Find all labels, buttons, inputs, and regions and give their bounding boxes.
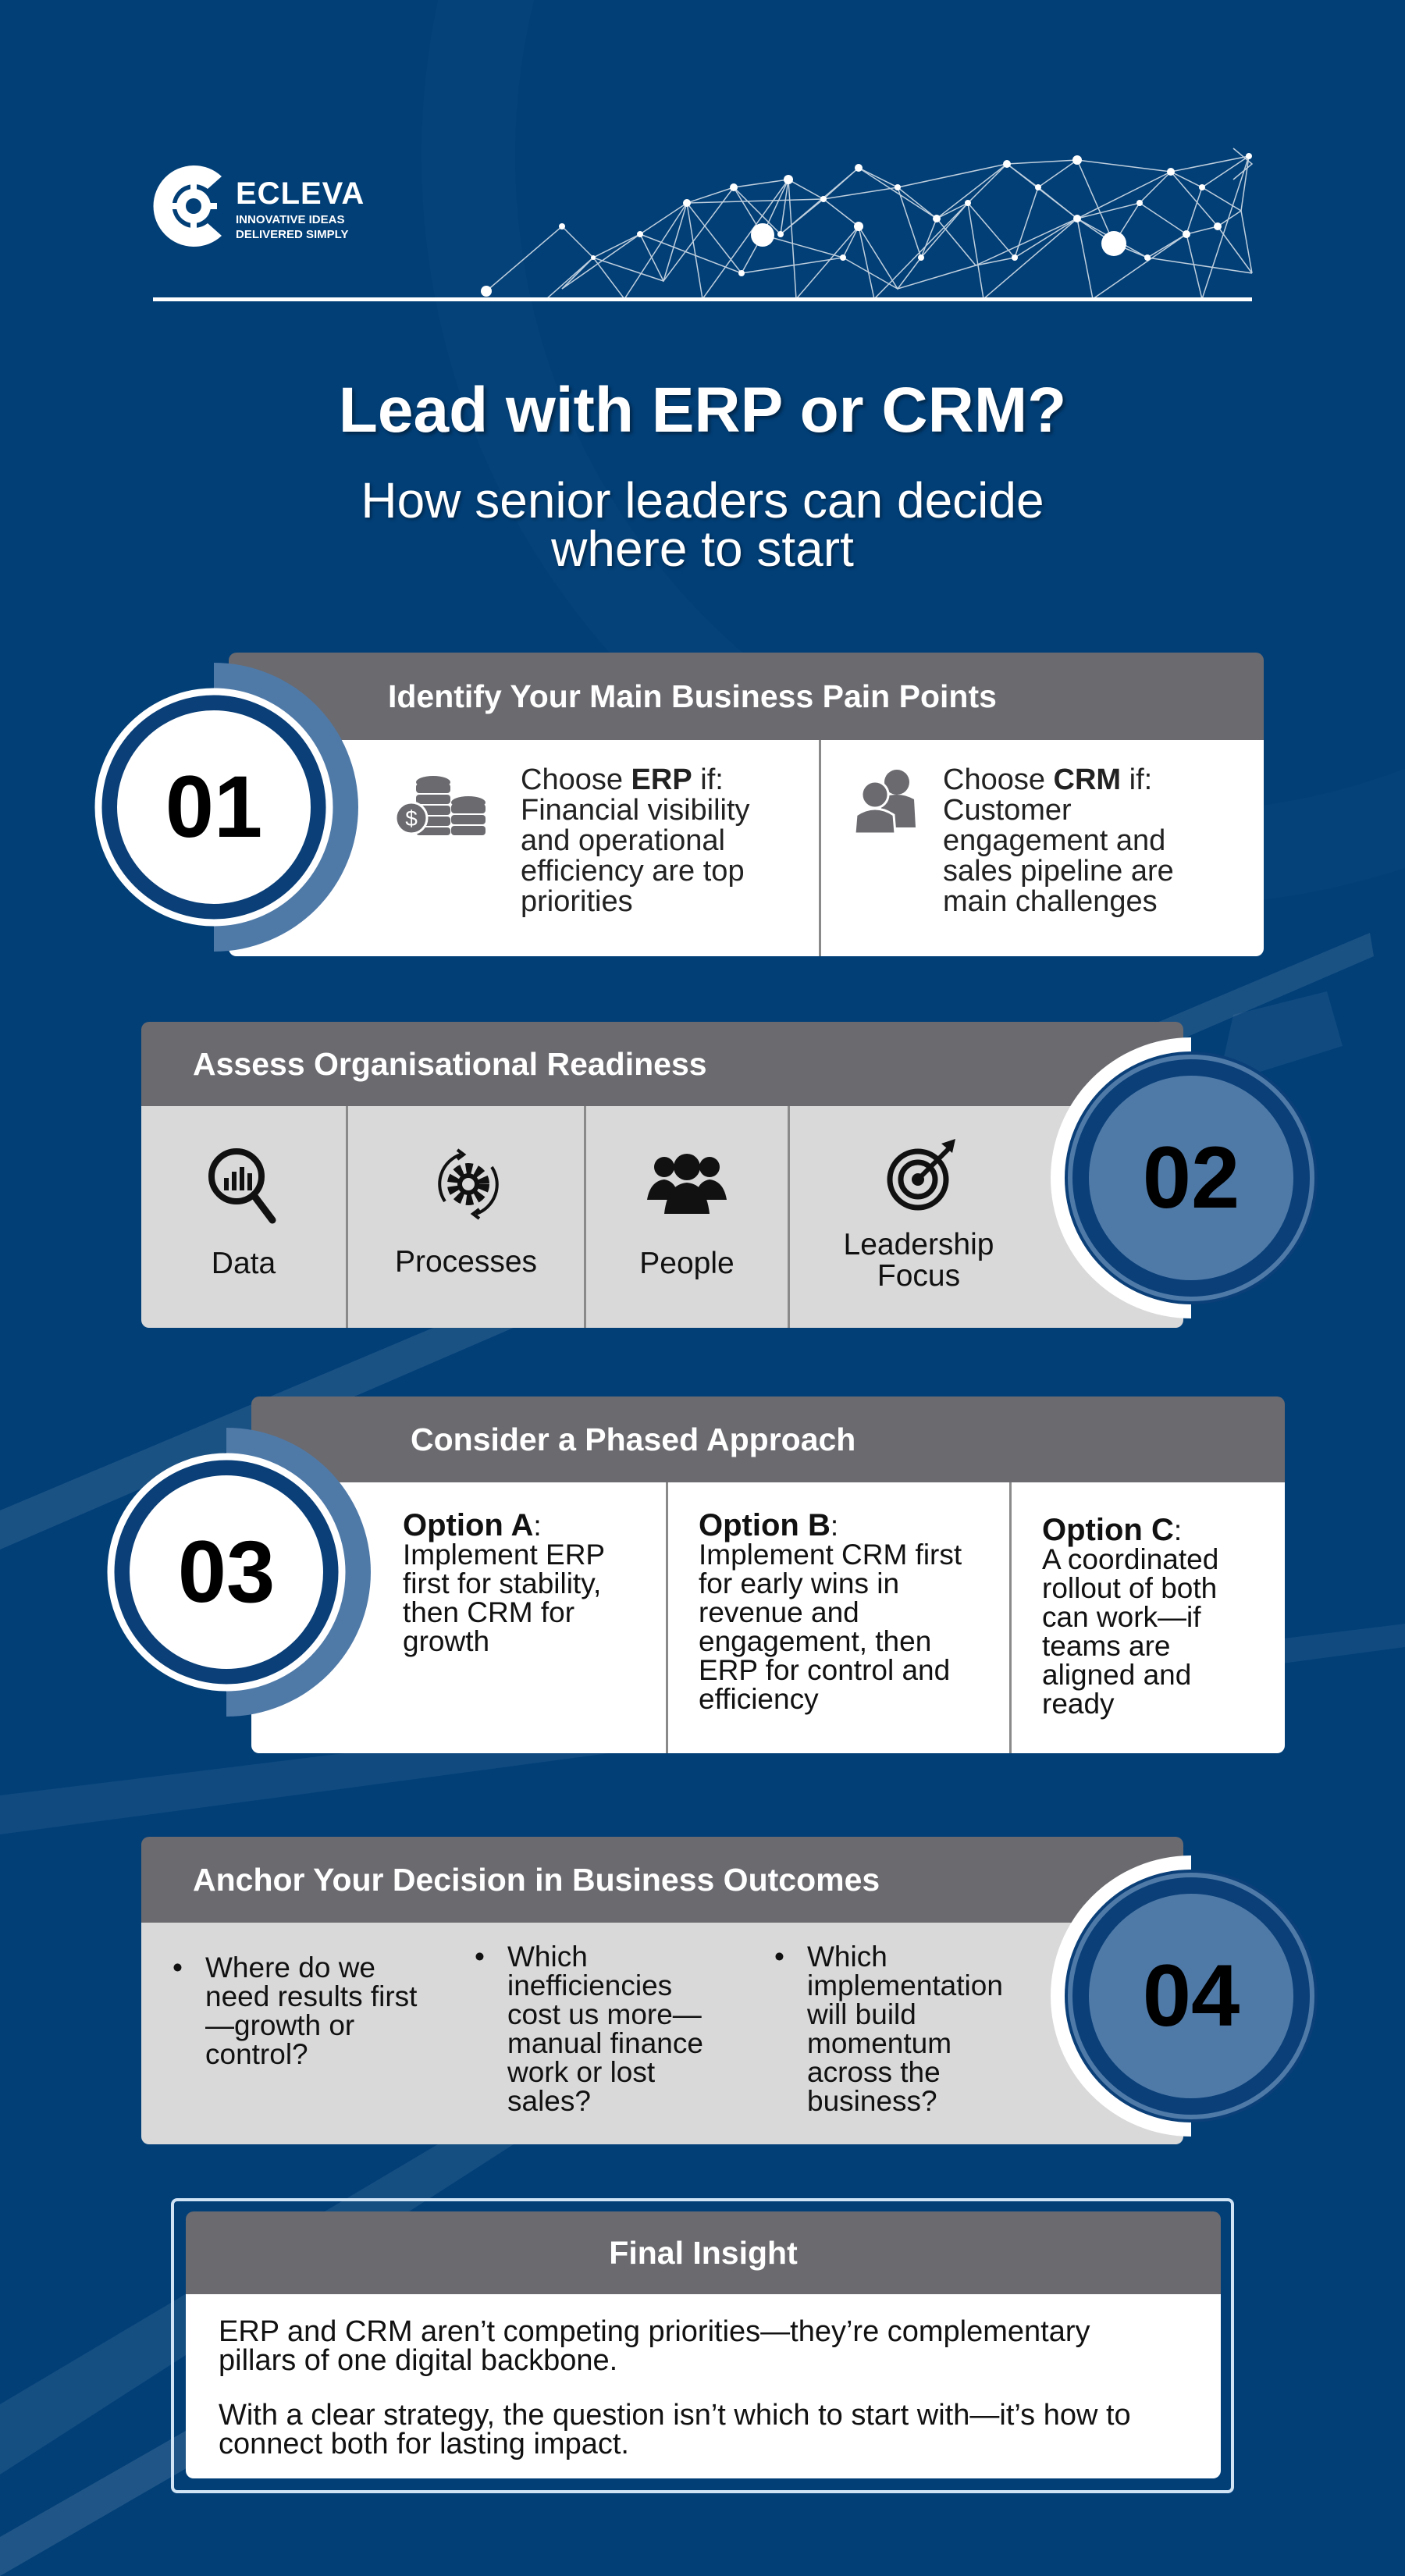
item: leadership focus: Leadership bbox=[843, 1228, 994, 1261]
bullet 3: across the bbox=[807, 2056, 941, 2088]
subtitle: where to start bbox=[551, 521, 854, 577]
body 1 bbox=[229, 740, 1264, 956]
bullet 1: —growth or bbox=[205, 2009, 354, 2041]
item: leadership focus bbox=[843, 1139, 994, 1293]
icon: coins: $ bbox=[405, 806, 418, 831]
header 3: Consider a Phased Approach bbox=[411, 1421, 855, 1457]
bullet 2: Which bbox=[507, 1941, 588, 1973]
number 03: 03 bbox=[178, 1523, 275, 1621]
final insight bbox=[171, 2198, 1234, 2493]
option B: Option B: bbox=[699, 1508, 838, 1542]
item: data: Data bbox=[212, 1247, 276, 1280]
bullet 1: control? bbox=[205, 2038, 308, 2070]
option A: Option A: bbox=[403, 1508, 542, 1542]
option B: ERP for control and bbox=[699, 1654, 950, 1686]
text: choose ERP: Choose ERP if: bbox=[521, 763, 724, 796]
bullet 3: • bbox=[774, 1941, 784, 1973]
bullet 2: sales? bbox=[507, 2085, 591, 2117]
header 1 bbox=[229, 653, 1264, 740]
text: choose CRM: Customer bbox=[943, 794, 1072, 827]
icon: gear C bbox=[153, 165, 222, 247]
option C: teams are bbox=[1042, 1630, 1171, 1662]
option A: Implement ERP bbox=[403, 1539, 605, 1571]
panel 1: pain points bbox=[95, 653, 1264, 956]
item: people bbox=[639, 1154, 735, 1280]
option C: rollout of both bbox=[1042, 1572, 1217, 1604]
header 2: Assess Organisational Readiness bbox=[193, 1046, 707, 1082]
logo: ECLEVA bbox=[236, 176, 365, 211]
bullet 2: • bbox=[475, 1941, 485, 1973]
header 3 bbox=[251, 1397, 1285, 1482]
header 2 bbox=[141, 1022, 1183, 1106]
bullet 1: Where do we bbox=[205, 1952, 375, 1984]
badge 03 bbox=[108, 1428, 371, 1717]
badge 01 bbox=[95, 663, 358, 952]
item: processes: Processes bbox=[395, 1245, 537, 1279]
bullet 1: • bbox=[173, 1952, 183, 1984]
logo: INNOVATIVE IDEAS bbox=[236, 213, 344, 226]
option C: can work—if bbox=[1042, 1601, 1201, 1633]
badge 02 bbox=[1051, 1037, 1314, 1318]
option A: then CRM for bbox=[403, 1596, 574, 1628]
text: choose ERP bbox=[521, 763, 750, 918]
text: choose ERP: priorities bbox=[521, 885, 633, 918]
text: choose ERP: Financial visibility bbox=[521, 794, 750, 827]
bullet 1: need results first bbox=[205, 1980, 417, 2012]
body text bbox=[186, 2294, 1221, 2478]
option B: engagement, then bbox=[699, 1625, 931, 1657]
header: final insight bbox=[186, 2211, 1221, 2294]
subtitle: How senior leaders can decide bbox=[361, 472, 1044, 528]
panel 3: phased approach bbox=[108, 1397, 1285, 1753]
option C bbox=[1042, 1513, 1218, 1720]
text: choose CRM: main challenges bbox=[943, 885, 1158, 918]
text: choose CRM: sales pipeline are bbox=[943, 855, 1174, 888]
option A bbox=[403, 1508, 605, 1657]
option B: efficiency bbox=[699, 1683, 819, 1715]
body 2 bbox=[141, 1106, 1183, 1328]
text: choose ERP: efficiency are top bbox=[521, 855, 745, 888]
item: data bbox=[208, 1148, 276, 1280]
logo bbox=[153, 165, 365, 247]
badge 04 bbox=[1051, 1856, 1314, 2137]
logo: DELIVERED SIMPLY bbox=[236, 228, 348, 241]
bullet 2: cost us more— bbox=[507, 1998, 702, 2030]
body 4 bbox=[141, 1923, 1183, 2144]
icon: coins bbox=[397, 776, 486, 835]
body 3 bbox=[251, 1482, 1285, 1753]
subtitle bbox=[361, 472, 1044, 577]
option B: revenue and bbox=[699, 1596, 859, 1628]
number 02: 02 bbox=[1143, 1129, 1240, 1226]
option C: A coordinated bbox=[1042, 1543, 1218, 1575]
bullet 3: momentum bbox=[807, 2027, 951, 2059]
bullet 3: implementation bbox=[807, 1969, 1003, 2001]
bullet 2 bbox=[475, 1941, 703, 2117]
body text: connect both for lasting impact. bbox=[219, 2428, 629, 2460]
option B bbox=[699, 1508, 962, 1715]
header 4: Anchor Your Decision in Business Outcomes bbox=[193, 1861, 880, 1897]
number 04: 04 bbox=[1143, 1947, 1240, 2044]
header: final insight: Final Insight bbox=[609, 2234, 798, 2270]
text: choose CRM: engagement and bbox=[943, 824, 1165, 857]
bullet 2: work or lost bbox=[507, 2056, 655, 2088]
text: choose CRM: Choose CRM if: bbox=[943, 763, 1152, 796]
body text: ERP and CRM aren’t competing priorities—they’re complementary bbox=[219, 2315, 1090, 2348]
option B: for early wins in bbox=[699, 1567, 899, 1599]
text: choose CRM bbox=[943, 763, 1174, 918]
option C: aligned and bbox=[1042, 1659, 1191, 1691]
bullet 3: business? bbox=[807, 2085, 937, 2117]
option C: Option C: bbox=[1042, 1513, 1182, 1547]
panel 4: business outcomes bbox=[141, 1837, 1314, 2144]
bullet 3: will build bbox=[807, 1998, 916, 2030]
text: choose ERP: and operational bbox=[521, 824, 725, 857]
panel 2: readiness bbox=[141, 1022, 1314, 1328]
bullet 1 bbox=[173, 1952, 417, 2070]
bullet 2: inefficiencies bbox=[507, 1969, 672, 2001]
body text: pillars of one digital backbone. bbox=[219, 2344, 617, 2377]
number 01: 01 bbox=[165, 758, 262, 856]
header 4 bbox=[141, 1837, 1183, 1923]
item: leadership focus: Focus bbox=[877, 1259, 960, 1293]
bullet 3: Which bbox=[807, 1941, 887, 1973]
header 1: Identify Your Main Business Pain Points bbox=[388, 678, 997, 713]
option A: first for stability, bbox=[403, 1567, 601, 1599]
option B: Implement CRM first bbox=[699, 1539, 962, 1571]
title: Lead with ERP or CRM? bbox=[339, 375, 1066, 446]
option C: ready bbox=[1042, 1688, 1115, 1720]
bullet 3 bbox=[774, 1941, 1003, 2117]
bullet 2: manual finance bbox=[507, 2027, 703, 2059]
icon: people bbox=[855, 770, 916, 832]
item: processes bbox=[395, 1148, 537, 1279]
item: people: People bbox=[639, 1247, 735, 1280]
body text: With a clear strategy, the question isn’t which to start with—it’s how to bbox=[219, 2399, 1131, 2432]
option A: growth bbox=[403, 1625, 489, 1657]
network graphic bbox=[153, 148, 1253, 301]
